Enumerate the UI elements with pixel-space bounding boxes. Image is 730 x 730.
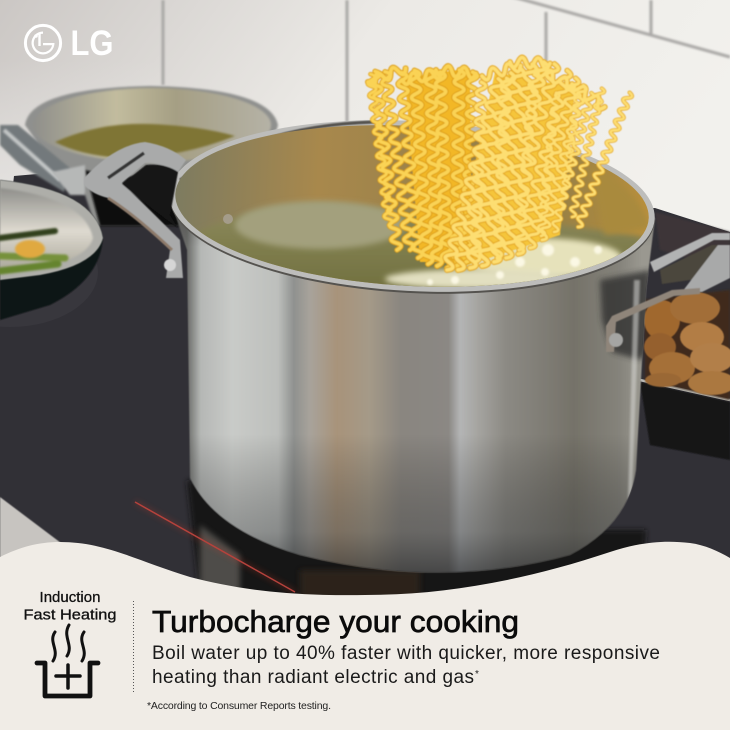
body copy: heating than radiant electric and gas [152,667,474,688]
fusilli pasta strands [366,57,633,271]
footnote: *According to Consumer Reports testing. [147,700,331,712]
icon: induction fast heating pot [37,625,98,696]
body copy: Boil water up to 40% faster with quicker, more responsive [152,643,660,664]
cream wave panel [0,542,730,730]
induction cooktop surface [0,172,730,600]
front left skillet with asparagus [0,180,103,327]
body copy [152,643,660,688]
body copy: * [475,669,479,680]
badge label: Induction Fast Heating: Induction [40,589,100,606]
right skillet with meatballs [640,290,730,460]
badge label: Induction Fast Heating [24,589,116,624]
LG wordmark: LG [70,24,114,63]
pot right handle [606,233,730,352]
wall tiles [0,0,730,300]
pot left handle [84,142,186,278]
pot reflection on cooktop [187,480,646,600]
badge label: Induction Fast Heating: Fast Heating [24,606,116,624]
red induction heating line [135,502,295,592]
heading: Turbocharge your cooking [152,604,519,639]
dotted divider [132,601,134,692]
back saucepan [0,86,278,226]
stock pot body [170,200,660,590]
LG emblem [25,25,61,61]
pot rim and interior [171,120,655,294]
LG logo [25,24,113,63]
